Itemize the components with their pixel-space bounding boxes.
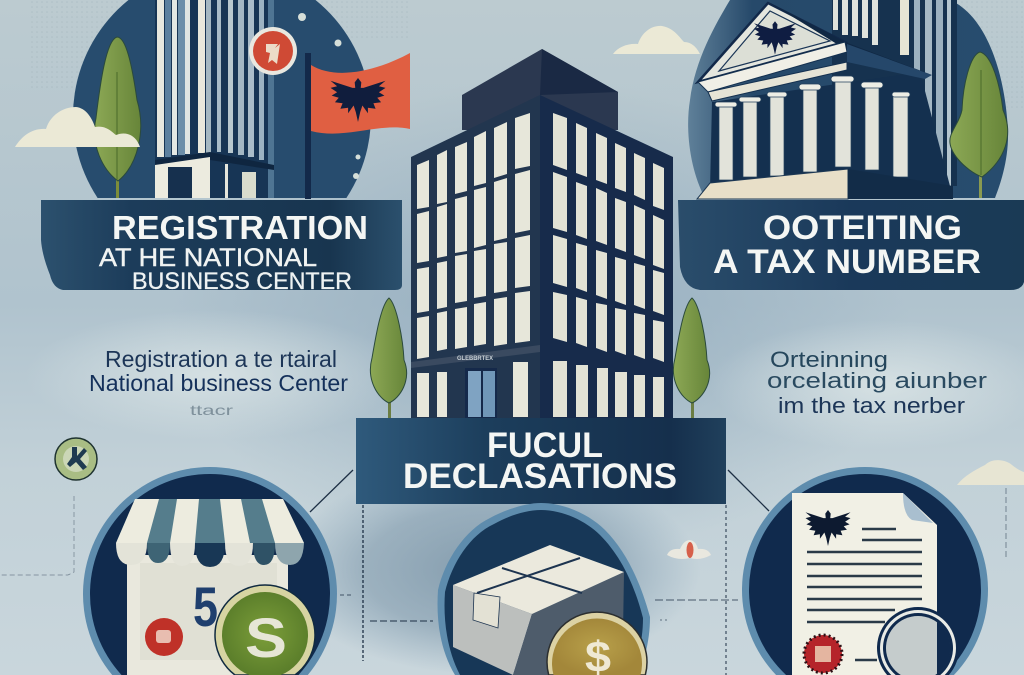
text block: registration description (89, 346, 348, 418)
entrance door (465, 368, 497, 418)
circle (83, 467, 337, 675)
banner: registration (41, 200, 402, 295)
panel: tax office illustration (613, 0, 1008, 199)
icon: tree (950, 52, 1008, 198)
penthouse (462, 49, 618, 130)
text block: registration description: Registration a te rtairal (105, 346, 337, 372)
text block: registration description: National business Center (89, 370, 348, 396)
icon: cloud (15, 107, 140, 147)
icon: left cypress tree (370, 298, 407, 418)
text block: tax number description: orcelating aiunber (767, 368, 987, 393)
shop sign number: 5 (193, 575, 218, 638)
building sign: GLEBBRTEX (457, 356, 493, 362)
icon: cloud right (957, 460, 1024, 485)
panel: document icon (742, 467, 988, 675)
panel: shop icon (83, 467, 337, 675)
eagle emblem (754, 21, 796, 55)
banner heading: FUCUL (487, 426, 603, 465)
columns (719, 80, 908, 180)
windows: right face (553, 113, 664, 362)
panel: registration illustration (15, 0, 410, 199)
banner heading: DECLASATIONS (403, 457, 677, 496)
banner heading: REGISTRATION (112, 209, 368, 246)
text block: tax number description: Orteinning (770, 347, 888, 372)
windows: left face (417, 113, 530, 359)
document text lines (807, 529, 922, 660)
icon: green coin: S (245, 606, 287, 669)
ground floor (411, 345, 664, 418)
icon: red seal (804, 635, 842, 673)
small white dots (298, 13, 360, 179)
egg-shaped badge (438, 503, 650, 675)
banner: fiscal declarations (356, 418, 726, 504)
icon: cardboard box (453, 545, 624, 675)
connector lines (0, 470, 1006, 675)
banner heading: A TAX NUMBER (713, 243, 981, 281)
banner heading: OOTEITING (763, 209, 962, 247)
icon: tower (155, 0, 274, 198)
icon: Albanian flag (305, 53, 410, 199)
icon: tower (832, 0, 957, 186)
icon: magnifying glass (877, 607, 959, 675)
document page (792, 493, 937, 675)
central office building (411, 49, 673, 418)
awning (116, 499, 304, 567)
circle (742, 467, 988, 675)
icon: gold coin (547, 612, 647, 675)
backdrop circle (688, 0, 1008, 198)
icon: small wrench badge (55, 438, 97, 480)
backdrop circle (73, 0, 371, 198)
icon: tree (95, 37, 141, 198)
icon: temple building (697, 2, 953, 199)
text block: tax number description: im the tax nerber (778, 393, 965, 418)
pediment (698, 3, 845, 82)
icon: small red cloud (667, 540, 711, 559)
panel: parcel icon (438, 503, 650, 675)
icon: red token (145, 618, 183, 656)
banner: tax number (678, 200, 1024, 290)
icon: right cypress tree (673, 298, 710, 418)
left face (411, 95, 540, 418)
text block: tax number description (767, 347, 987, 418)
eagle emblem (806, 510, 850, 546)
icon: cloud (613, 26, 700, 54)
right face (540, 95, 673, 418)
banner line: BUSINESS CENTER (132, 268, 352, 295)
icon: green coin (215, 585, 315, 675)
text block: registration description: ttacr (190, 402, 234, 418)
steps (697, 169, 848, 199)
entablature (698, 42, 847, 92)
icon: red badge (249, 27, 297, 75)
banner line: AT HE NATIONAL (99, 244, 317, 272)
shop body (127, 555, 288, 675)
